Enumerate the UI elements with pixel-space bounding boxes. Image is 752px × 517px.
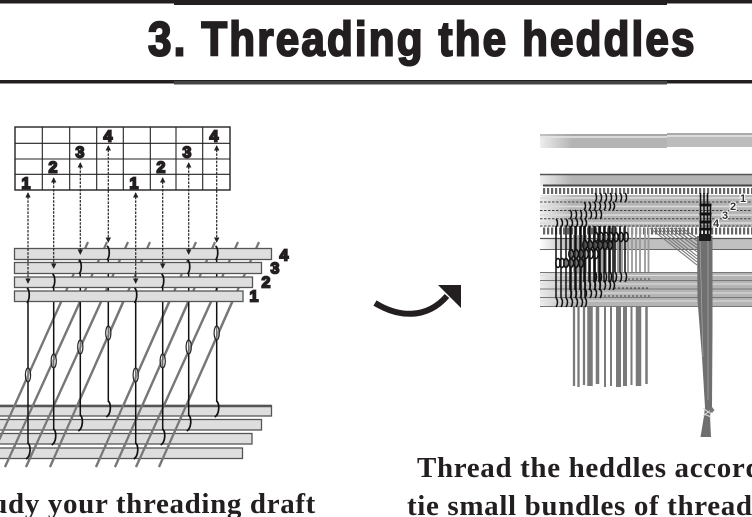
shaft numbers: 1 <box>250 288 259 306</box>
lower shaft bars <box>0 406 272 458</box>
draft numbers: 1 <box>22 176 31 192</box>
heddle wires, hooks and eyes <box>556 193 628 307</box>
shaft labels: 3 <box>722 210 728 222</box>
shaft labels <box>713 193 746 230</box>
title: 3. Threading the heddles <box>148 12 694 66</box>
fanned threads <box>650 228 697 265</box>
upper shaft bars <box>14 248 272 302</box>
warp threads behind the shafts <box>0 242 259 467</box>
heddle hooks <box>26 246 219 459</box>
tied thread bundle <box>697 193 714 437</box>
draft grid <box>15 127 230 190</box>
lower frame bands <box>540 272 752 307</box>
draft numbers: 3 <box>76 144 85 162</box>
shaft labels: 2 <box>730 201 736 213</box>
draft numbers <box>22 128 219 192</box>
warp threads over the lower shafts <box>0 302 232 467</box>
hanging threads <box>574 307 646 387</box>
draft numbers: 3 <box>183 144 192 162</box>
draft numbers: 2 <box>157 160 166 176</box>
heddle wires <box>28 258 217 444</box>
arrow <box>375 285 461 314</box>
shaft numbers <box>250 248 289 306</box>
draft numbers: 2 <box>49 160 58 176</box>
dashed arrows from draft to heddles <box>28 146 217 283</box>
draft numbers: 1 <box>130 176 139 192</box>
caption right <box>407 452 752 517</box>
heddle eyes <box>25 326 219 382</box>
draft numbers: 4 <box>210 128 219 146</box>
shaft numbers: 2 <box>262 274 271 292</box>
panel: threaded loom photo-illustration <box>540 133 752 437</box>
panel: threading draft diagram <box>0 127 289 467</box>
shaft numbers: 3 <box>271 260 280 278</box>
shaft numbers: 4 <box>280 248 289 264</box>
draft numbers: 4 <box>104 128 113 146</box>
upper frame bands <box>540 174 752 250</box>
thread group between bands <box>574 228 648 272</box>
shaft labels: 4 <box>713 218 720 230</box>
shaft labels: 1 <box>740 193 746 205</box>
back beam <box>540 133 752 148</box>
header rules <box>0 0 752 84</box>
